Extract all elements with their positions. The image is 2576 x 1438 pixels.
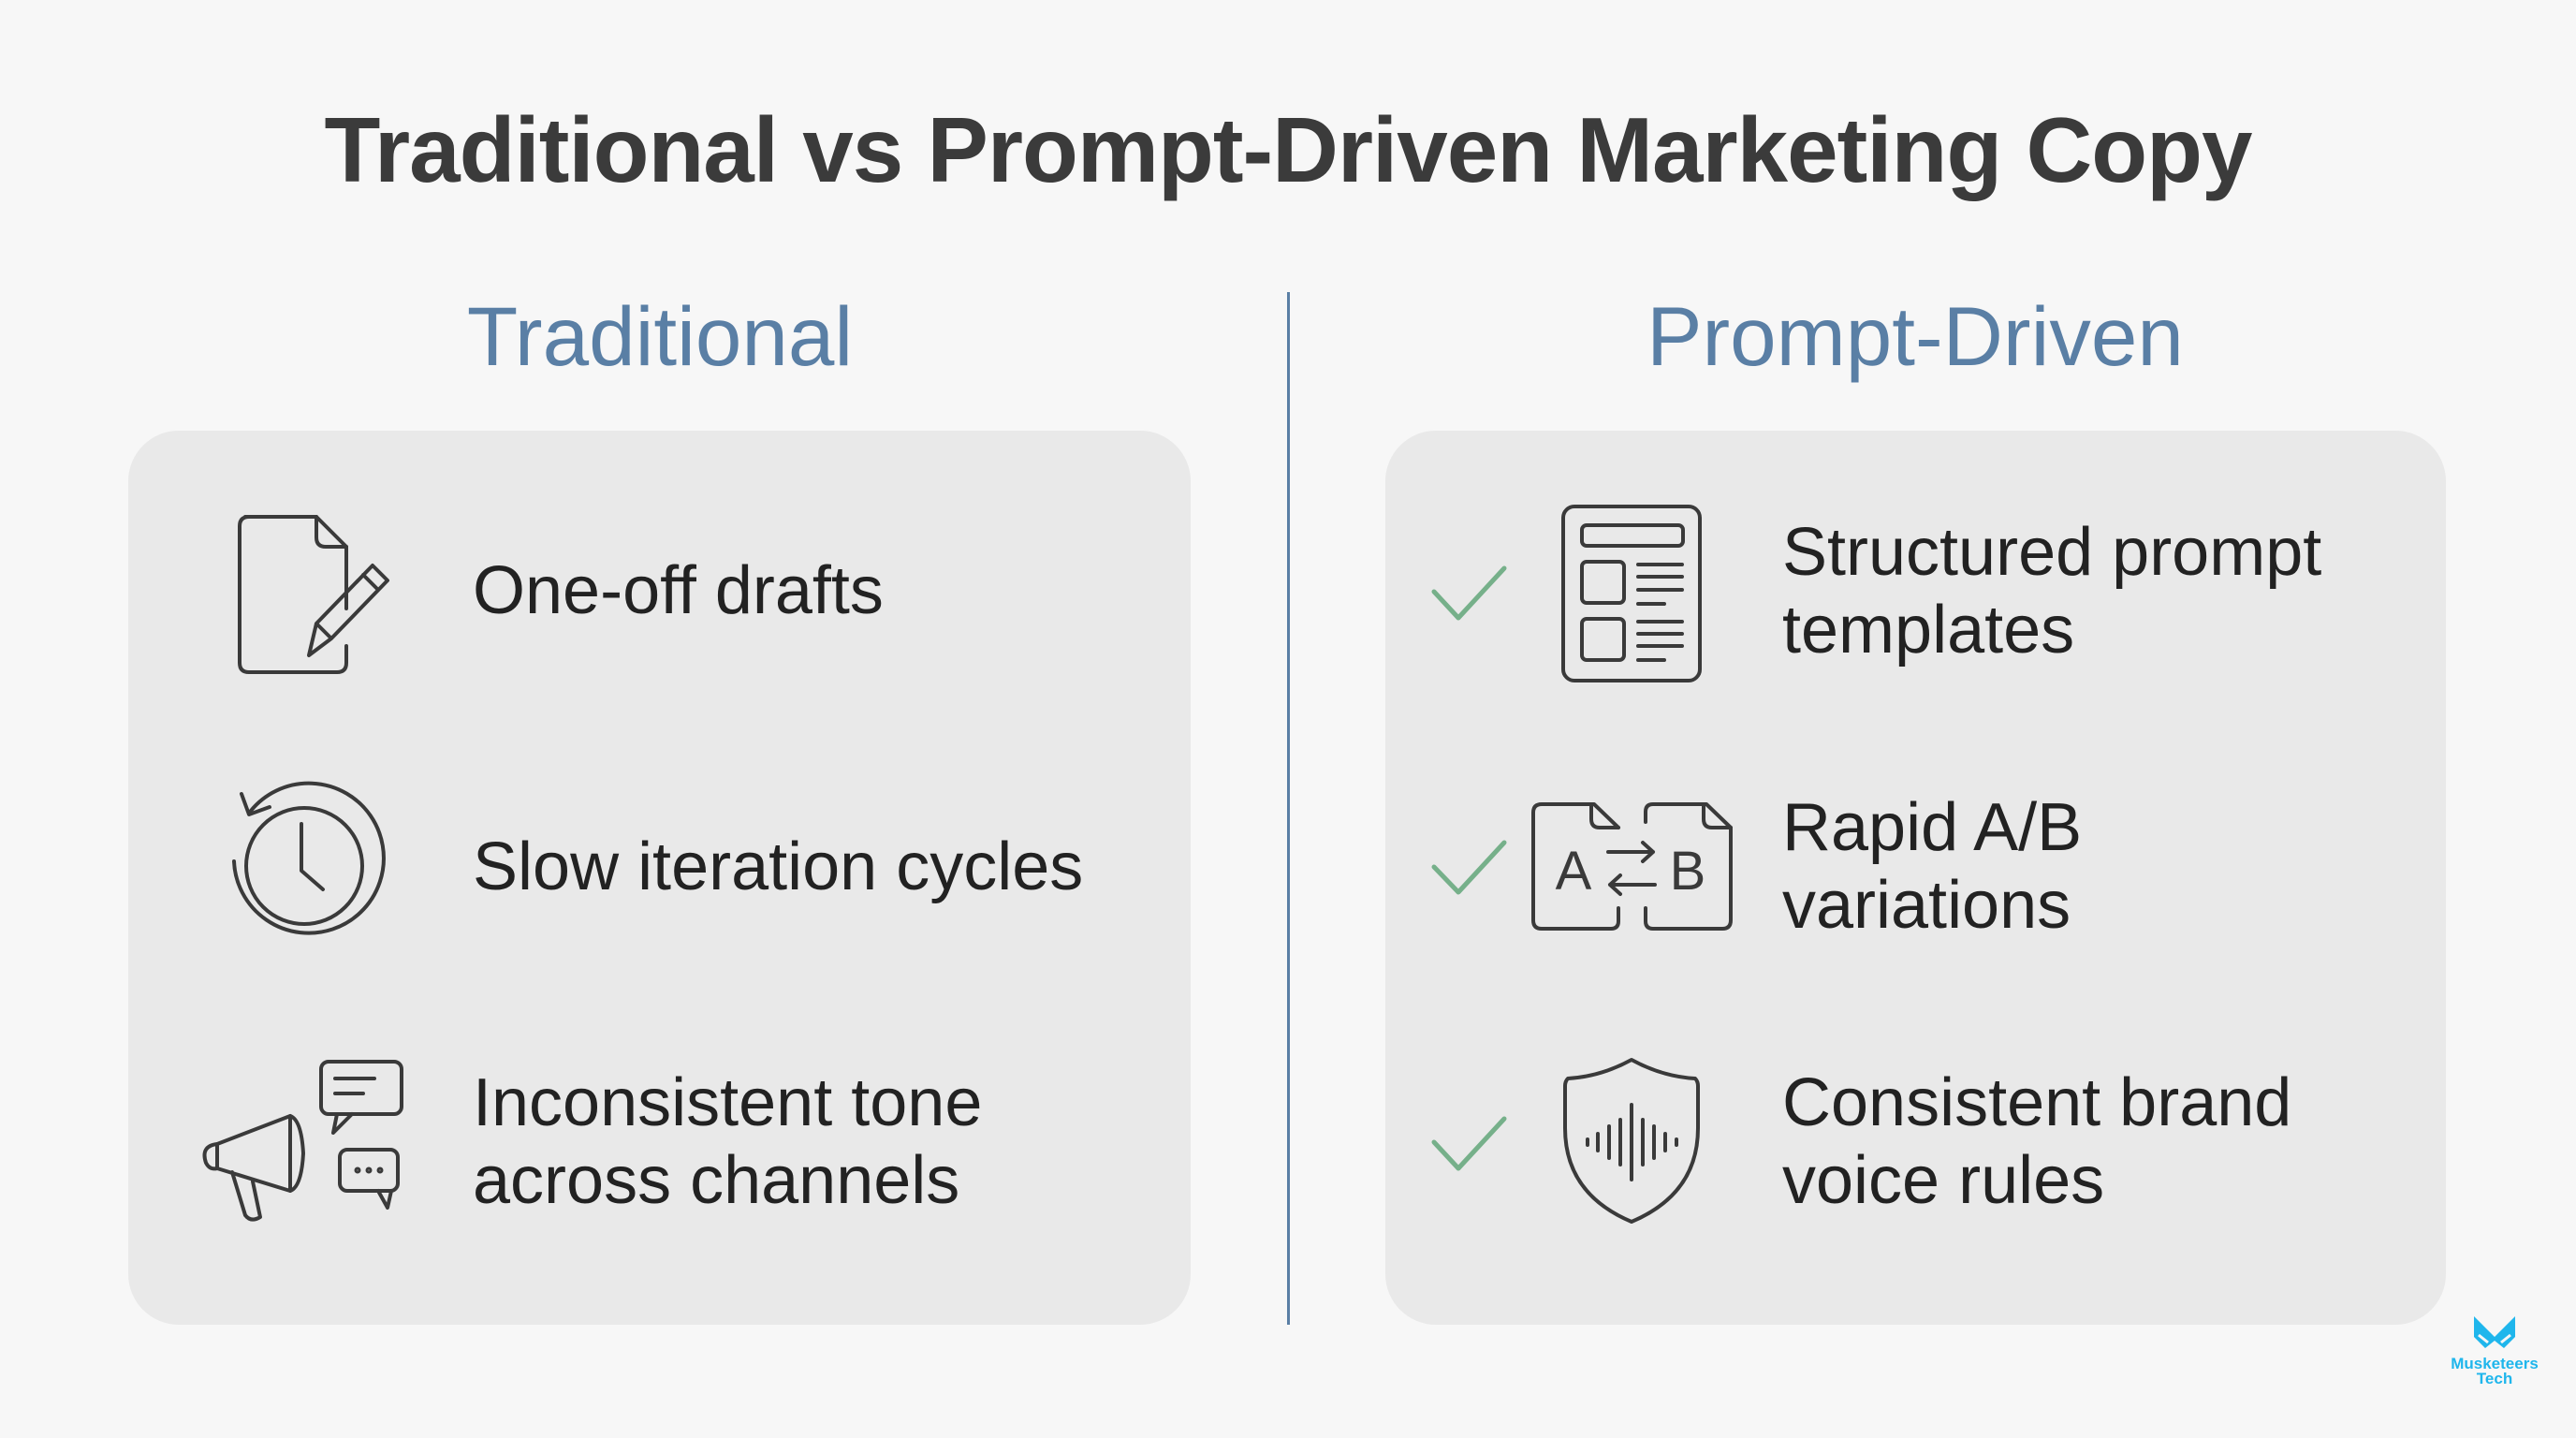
icon: clock with arrow [234,784,384,933]
panel: prompt-driven [1385,431,2446,1325]
item: brand voice: voice rules [1782,1143,2104,1218]
icon: megaphone with chat bubbles [204,1062,402,1220]
item: inconsistent tone: Inconsistent tone [473,1065,982,1140]
icon: A/B swap documents [1533,804,1731,929]
item: structured templates: templates [1782,593,2074,668]
icon: document with pencil [240,517,388,672]
item: rapid A/B [1782,790,2082,943]
logo: Musketeers Tech: Musketeers [2451,1355,2539,1372]
item: structured templates [1782,515,2321,668]
icon: checkmark 2 [1434,843,1504,892]
panel: traditional [128,431,1191,1325]
item: inconsistent tone: across channels [473,1143,959,1218]
item: rapid A/B: Rapid A/B [1782,790,2082,865]
heading: traditional: Traditional [467,289,853,383]
item: inconsistent tone [473,1065,982,1218]
item: structured templates: Structured prompt [1782,515,2321,590]
item: one-off drafts: One-off drafts [473,553,884,628]
item: brand voice [1782,1065,2291,1218]
item: brand voice: Consistent brand [1782,1065,2291,1140]
divider line [1287,292,1290,1325]
item: rapid A/B: variations [1782,868,2071,943]
logo: Musketeers Tech [2451,1316,2539,1387]
icon: template layout [1563,506,1700,681]
icon: A/B swap documents: A [1556,841,1592,902]
heading: prompt-driven: Prompt-Driven [1647,289,2184,383]
item: slow iteration: Slow iteration cycles [473,829,1083,904]
title: Traditional vs Prompt-Driven Marketing Copy [325,98,2251,201]
icon: shield with soundwave [1565,1060,1698,1222]
icon: checkmark 3 [1434,1119,1504,1168]
logo: Musketeers Tech: Tech [2477,1370,2512,1387]
icon: A/B swap documents: B [1670,841,1705,902]
icon: checkmark 1 [1434,568,1504,618]
